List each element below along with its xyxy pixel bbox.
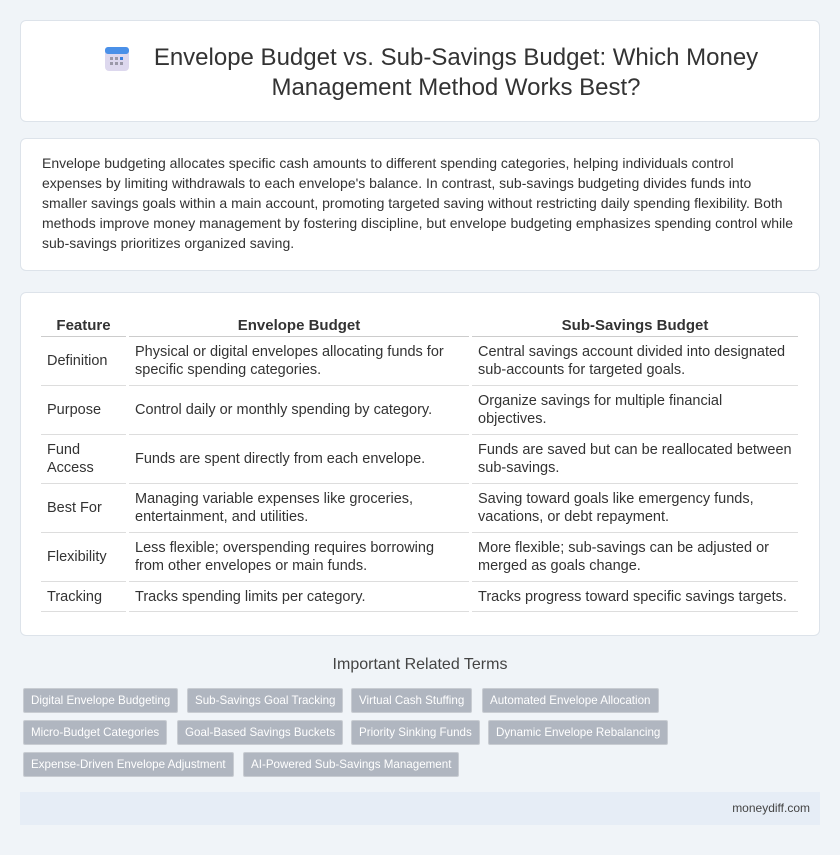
comparison table: Tracks progress toward specific savings targets. <box>478 588 787 604</box>
footer <box>20 792 820 825</box>
tags: Automated Envelope Allocation <box>490 694 650 707</box>
title: Envelope Budget vs. Sub-Savings Budget: Which Money Management Method Works Best? <box>154 44 758 101</box>
tags: Digital Envelope Budgeting <box>31 694 170 707</box>
comparison table: Organize savings for multiple financial objectives. <box>478 393 722 427</box>
comparison table: Feature <box>56 317 111 334</box>
comparison table: Flexibility <box>47 549 107 565</box>
comparison table <box>20 292 820 636</box>
tags: Priority Sinking Funds <box>359 726 472 739</box>
icon: calendar <box>105 47 129 71</box>
comparison table: Tracks spending limits per category. <box>135 588 365 604</box>
comparison table: More flexible; sub-savings can be adjusted or merged as goals change. <box>478 540 769 574</box>
tags: Expense-Driven Envelope Adjustment <box>31 758 226 771</box>
intro text <box>20 138 820 271</box>
intro text: Envelope budgeting allocates specific cash amounts to different spending categories, helping individuals control expenses by limiting withdrawals to each envelope's balance. In contrast, sub-savings budgeting divides funds into smaller savings goals within a main account, promoting targeted saving without restricting daily spending flexibility. Both methods improve money management by fostering discipline, but envelope budgeting emphasizes spending control while sub-savings prioritizes organized saving. <box>42 155 793 251</box>
comparison table: Envelope Budget <box>238 317 360 334</box>
comparison table: Sub-Savings Budget <box>562 317 708 334</box>
comparison table: Managing variable expenses like groceries, entertainment, and utilities. <box>135 491 413 525</box>
header card <box>20 20 820 122</box>
tags: Virtual Cash Stuffing <box>359 694 464 707</box>
tags: Dynamic Envelope Rebalancing <box>496 726 660 739</box>
comparison table: Less flexible; overspending requires borrowing from other envelopes or main funds. <box>135 540 434 574</box>
tags: Sub-Savings Goal Tracking <box>195 694 335 707</box>
comparison table: Tracking <box>47 588 102 604</box>
footer: moneydiff.com <box>732 801 810 815</box>
comparison table: Definition <box>47 353 107 369</box>
related terms heading: Important Related Terms <box>333 656 507 673</box>
comparison table: Control daily or monthly spending by category. <box>135 402 432 418</box>
tags: Micro-Budget Categories <box>31 726 159 739</box>
comparison table: Funds are spent directly from each envelope. <box>135 451 425 467</box>
comparison table: Physical or digital envelopes allocating funds for specific spending categories. <box>135 344 444 378</box>
comparison table: Saving toward goals like emergency funds, vacations, or debt repayment. <box>478 491 754 525</box>
comparison table: Central savings account divided into designated sub-accounts for targeted goals. <box>478 344 785 378</box>
tags: AI-Powered Sub-Savings Management <box>251 758 451 771</box>
comparison table: Fund Access <box>47 442 94 476</box>
comparison table: Funds are saved but can be reallocated between sub-savings. <box>478 442 792 476</box>
tags: Goal-Based Savings Buckets <box>185 726 335 739</box>
comparison table: Best For <box>47 500 102 516</box>
comparison table: Purpose <box>47 402 101 418</box>
